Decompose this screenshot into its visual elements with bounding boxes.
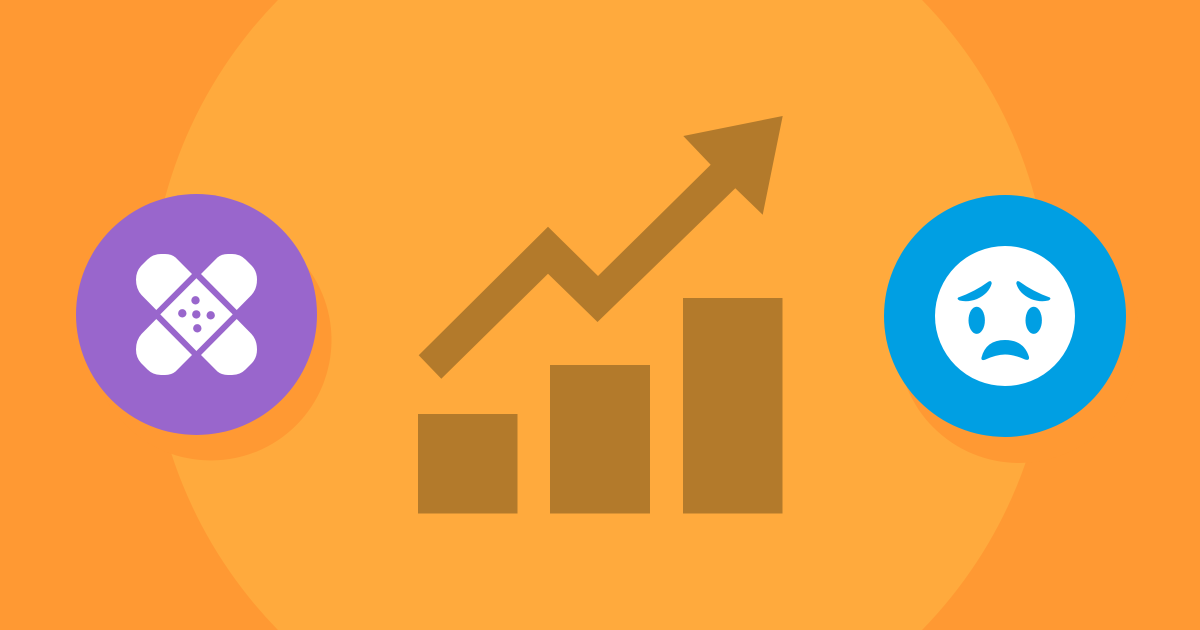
badge circle bbox=[76, 194, 317, 435]
bandage end: bottom left bbox=[136, 319, 192, 375]
bandage centre pad bbox=[160, 278, 233, 351]
left eye bbox=[968, 307, 985, 334]
background circle bbox=[150, 0, 1050, 630]
bar: large bbox=[683, 298, 782, 514]
bandage end: top right bbox=[201, 254, 257, 310]
bandage end: bottom right bbox=[201, 319, 257, 375]
left eyebrow bbox=[958, 281, 992, 301]
icon: worried face bbox=[935, 246, 1075, 386]
right eyebrow bbox=[1016, 281, 1050, 301]
icon badge: sad face bbox=[884, 195, 1140, 463]
bar: small bbox=[418, 414, 518, 514]
icon badge: bandage bbox=[76, 194, 332, 460]
face bbox=[935, 246, 1075, 386]
badge shadow bbox=[898, 221, 1140, 463]
badge shadow bbox=[90, 220, 332, 460]
arrow: rising trend bbox=[419, 116, 783, 379]
mouth bbox=[981, 340, 1029, 360]
badge circle bbox=[884, 195, 1126, 437]
icon: crossed bandage bbox=[136, 254, 257, 375]
right eye bbox=[1026, 307, 1042, 334]
growth chart icon bbox=[418, 116, 783, 514]
bar: medium bbox=[550, 365, 650, 514]
bandage end: top left bbox=[136, 254, 192, 310]
